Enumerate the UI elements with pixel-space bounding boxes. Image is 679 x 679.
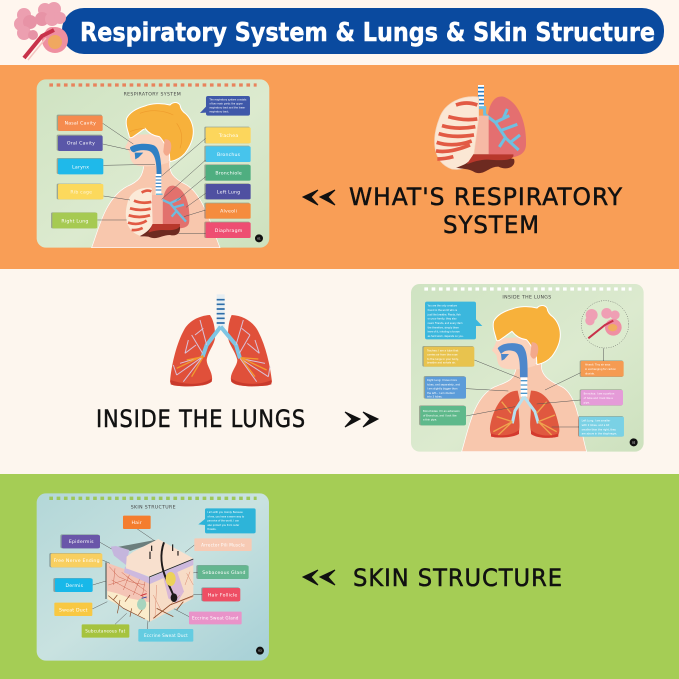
- label: Diaphragm: Diaphragm: [215, 228, 243, 234]
- label: Nasal Cavity: Nasal Cavity: [65, 121, 96, 127]
- text box: right lung: lobes, and separately, and: [427, 382, 460, 386]
- callout bubble: respiratory tract and the lower: [209, 107, 245, 110]
- text box: alveoli: in exchanging for carbon: [585, 367, 616, 371]
- text box: trachea: carries air from the nose: [427, 353, 458, 357]
- label: Subcutaneous Fat: [82, 624, 129, 638]
- callout bubble: of me, you have a warm way to: [207, 515, 245, 518]
- label: Rib cage: [57, 184, 103, 199]
- heading: skin structure: SKIN STRUCTURE: [353, 564, 563, 592]
- heading: what's respiratory system: [303, 183, 623, 239]
- label: Larynx: Larynx: [72, 165, 89, 171]
- text box: trachea: [422, 346, 474, 367]
- heading: inside the lungs: INSIDE THE LUNGS: [96, 405, 306, 433]
- leader lines: [466, 348, 603, 427]
- text box: trachea: breathe and exhale air.: [427, 360, 456, 364]
- icon: large lungs and ribcage: [435, 85, 526, 173]
- label: Free Nerve Ending: Free Nerve Ending: [54, 558, 100, 564]
- callout bubble: also protect you from outer: [207, 524, 239, 527]
- text box: bronchus: Bronchus: I am a portion: [584, 392, 615, 396]
- callout bubble: as hard work, depends on you.: [428, 335, 464, 338]
- label: Bronchiole: [204, 164, 251, 181]
- text box: left lung: smaller than the right, they: [582, 427, 616, 431]
- callout bubble: respiratory tract.: [209, 111, 229, 114]
- poster heading: RESPIRATORY SYSTEM: [124, 92, 181, 98]
- callout bubble: The respiratory system consists: [209, 99, 247, 102]
- label: Bronchiole: Bronchiole: [215, 171, 242, 177]
- label: Sebaceous Gland: [196, 565, 249, 579]
- text box: alveoli: dioxide.: [585, 371, 595, 375]
- icon: alveoli cluster: [14, 2, 68, 60]
- arrows pointing right: [345, 412, 378, 427]
- band: cream lungs section: [0, 269, 679, 474]
- callout bubble: just like breathe. Plants, fish: [427, 313, 461, 316]
- label: Hair Follicle: [201, 587, 240, 601]
- label: Eccrine Sweat Gland: [189, 612, 242, 624]
- panel: respiratory system poster: [37, 79, 269, 248]
- text box: right lung: Right Lung: I have more: [427, 378, 457, 382]
- label: Epidermis: [60, 534, 100, 548]
- page number: 02: [632, 440, 636, 444]
- page number: [255, 234, 263, 242]
- text box: alveoli: Alveoli: Tiny air sacs: [585, 363, 611, 367]
- label: Dermis: [53, 578, 93, 592]
- callout bubble: You are the only creature: [428, 305, 457, 308]
- label: Dermis: Dermis: [65, 583, 84, 589]
- band: orange respiratory section: [0, 65, 679, 269]
- label: Trachea: [204, 127, 251, 143]
- heading: what's respiratory system: WHAT'S RESPIRATORY: [349, 183, 623, 211]
- callout bubble: threats.: [207, 528, 217, 531]
- label: Alveoli: Alveoli: [220, 209, 237, 215]
- label: Alveoli: [204, 203, 251, 219]
- callout bubble: [198, 508, 256, 533]
- page number: 01: [257, 236, 261, 240]
- text box: left lung: with 2 lobes, and a bit: [582, 423, 609, 427]
- boy illustration with lungs: [462, 305, 587, 452]
- callout bubble: need. Friends, and every item: [428, 322, 463, 325]
- label: Rib cage: Rib cage: [70, 190, 92, 196]
- label: Nasal Cavity: [57, 115, 103, 131]
- callout bubble: of two main parts: the upper: [209, 103, 243, 106]
- text box: bronchus: [580, 389, 623, 406]
- text box: bronchioles: [419, 405, 466, 425]
- poster heading: INSIDE THE LUNGS: [502, 295, 552, 301]
- skin cube illustration: [106, 539, 193, 622]
- label: Right Lung: [51, 212, 97, 228]
- label: Sebaceous Gland: Sebaceous Gland: [202, 570, 246, 576]
- page number: [630, 438, 638, 446]
- title banner: [62, 8, 664, 54]
- text box: right lung: into 3 lobes.: [427, 395, 443, 399]
- arrows pointing left: [303, 570, 335, 585]
- label: Sweat Duct: Sweat Duct: [59, 607, 88, 613]
- leader lines: [97, 123, 206, 233]
- band: green skin section: [0, 474, 679, 679]
- callout bubble: perceive of the world. I can: [207, 520, 240, 523]
- text box: bronchioles: Bronchioles: I'm an extension: [423, 409, 460, 413]
- text box: bronchus: pipe.: [584, 400, 590, 404]
- label: Eccrine Sweat Duct: Eccrine Sweat Duct: [144, 633, 188, 638]
- text box: bronchioles: of Bronchus, and I look like: [423, 413, 457, 417]
- arrows pointing left: [303, 190, 335, 205]
- label: Oral Cavity: Oral Cavity: [67, 141, 95, 147]
- binding dots: [49, 493, 257, 503]
- boy illustration with lungs: [92, 102, 220, 248]
- label: Hair Follicle: Hair Follicle: [208, 592, 237, 598]
- alveoli magnifier: [581, 301, 629, 348]
- callout bubble: [200, 96, 250, 116]
- text box: bronchioles: a thin pipe.: [423, 418, 437, 422]
- text box: trachea: to the lungs in your body,: [427, 357, 459, 361]
- label: Larynx: [57, 158, 103, 174]
- panel: inside the lungs poster: [411, 284, 644, 452]
- binding dots: [424, 284, 632, 294]
- binding dots: [49, 80, 257, 90]
- label: Trachea: Trachea: [218, 133, 238, 139]
- page number: 03: [258, 649, 262, 653]
- text box: alveoli: [580, 360, 624, 377]
- text box: right lung: the left... I am divided: [427, 391, 455, 395]
- callout bubble: found in the world who is: [428, 309, 458, 312]
- label: Free Nerve Ending: [49, 553, 102, 567]
- text box: left lung: [578, 416, 624, 437]
- label: Left Lung: [204, 183, 251, 199]
- label: Bronchus: Bronchus: [217, 152, 241, 158]
- label: Left Lung: Left Lung: [217, 190, 240, 196]
- poster heading: SKIN STRUCTURE: [131, 504, 176, 510]
- heading: what's respiratory system: SYSTEM: [443, 211, 540, 239]
- text box: right lung: I am slightly bigger than: [427, 387, 458, 391]
- label: Right Lung: Right Lung: [61, 218, 89, 224]
- page number: [256, 647, 264, 655]
- label: Hair: Hair: [131, 520, 142, 526]
- label: Bronchus: [204, 146, 251, 162]
- text box: left lung: Left Lung: I am smaller: [582, 419, 611, 423]
- text box: bronchus: of tube and I look like a: [584, 396, 613, 400]
- label: Arrector Pili Muscle: Arrector Pili Muscle: [201, 542, 245, 547]
- label: Eccrine Sweat Gland: Eccrine Sweat Gland: [192, 616, 239, 621]
- text box: trachea: Trachea: I am a tube that: [427, 348, 458, 352]
- label: Eccrine Sweat Duct: [138, 629, 193, 642]
- icon: inside lungs: [170, 294, 272, 386]
- label: Subcutaneous Fat: Subcutaneous Fat: [85, 629, 126, 634]
- leader lines: [92, 529, 202, 629]
- label: Hair: [123, 516, 151, 529]
- label: Diaphragm: [204, 222, 251, 238]
- callout bubble: I am with you mainly. Because: [207, 511, 243, 514]
- callout bubble: on your family, they also: [428, 318, 457, 321]
- label: Sweat Duct: [54, 603, 92, 616]
- text box: left lung: are above in the diaphragm.: [582, 432, 617, 436]
- callout bubble: the therefore, simply them: [428, 326, 460, 329]
- callout bubble: here of it, inhaling is known: [428, 331, 460, 334]
- panel: skin structure poster: [37, 493, 269, 661]
- label: Oral Cavity: [57, 135, 103, 151]
- text box: right lung: [424, 376, 466, 399]
- callout bubble: [425, 302, 482, 339]
- label: Arrector Pili Muscle: [194, 538, 252, 551]
- label: Epidermis: Epidermis: [69, 539, 94, 545]
